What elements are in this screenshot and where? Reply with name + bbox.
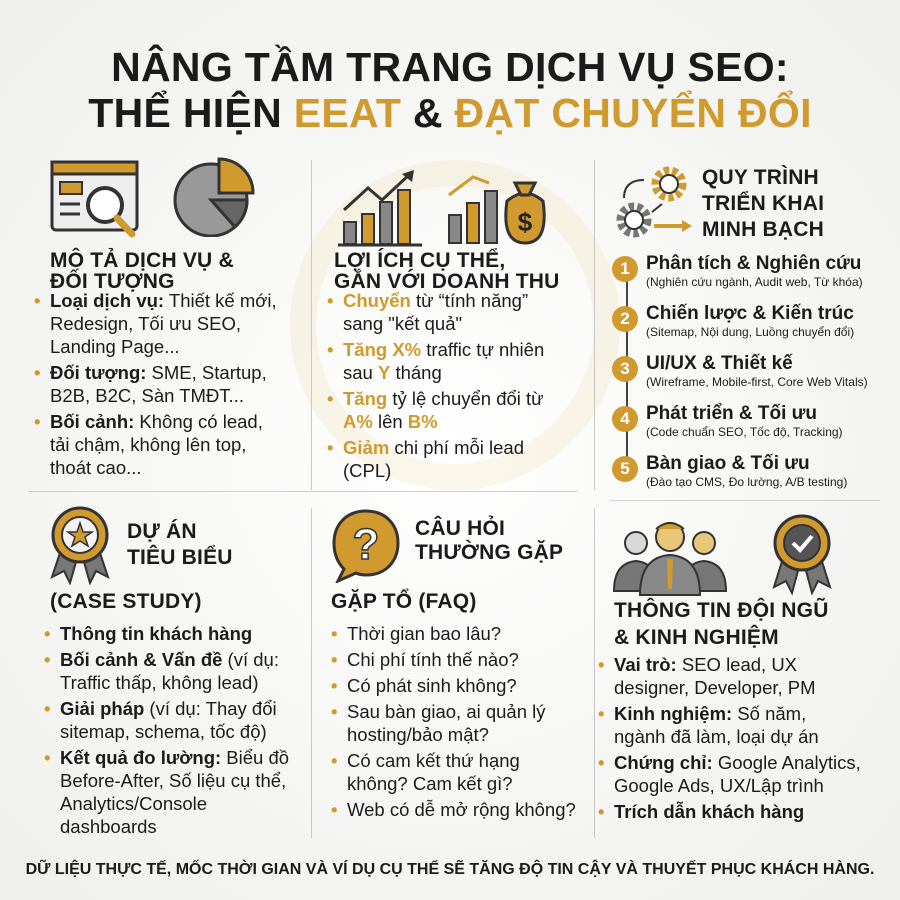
bullet list: Kinh nghiệm: Số năm, — [614, 703, 806, 724]
heading: TRIỂN KHAI — [702, 192, 824, 215]
bullet list: Loại dịch vụ: Thiết kế mới, — [50, 290, 277, 311]
heading: MINH BẠCH — [702, 218, 824, 241]
heading — [334, 248, 559, 293]
bullet list: Web có dễ mở rộng không? — [347, 799, 576, 820]
panel: process: (Code chuẩn SEO, Tốc độ, Tracking) — [646, 425, 843, 439]
bullet list: Giải pháp (ví dụ: Thay đổi — [60, 698, 277, 719]
bullet list: sitemap, schema, tốc độ) — [60, 721, 267, 742]
bullet list: sang "kết quả" — [343, 313, 462, 334]
icon: award badge — [50, 506, 110, 585]
bullet list — [332, 623, 576, 820]
bullet list: Có phát sinh không? — [347, 675, 517, 696]
bullet list: Kết quả đo lường: Biểu đồ — [60, 747, 289, 768]
bullet list: Google Ads, UX/Lập trình — [614, 775, 824, 796]
panel: process: (Sitemap, Nội dung, Luồng chuyển đổi) — [646, 325, 854, 339]
heading: & KINH NGHIỆM — [614, 626, 779, 649]
bullet list: Tăng tỷ lệ chuyển đổi từ — [343, 388, 544, 409]
bullet list: Analytics/Console — [60, 793, 207, 814]
heading: THƯỜNG GẶP — [415, 541, 563, 564]
bullet list: Giảm chi phí mỗi lead — [343, 437, 524, 458]
footer: DỮ LIỆU THỰC TẾ, MỐC THỜI GIAN VÀ VÍ DỤ CỤ THỂ SẼ TĂNG ĐỘ TIN CẬY VÀ THUYẾT PHỤC KHÁCH HÀNG. — [26, 861, 874, 878]
panel: process: Bàn giao & Tối ưu — [646, 453, 810, 474]
panel: process: UI/UX & Thiết kế — [646, 353, 793, 374]
bullet list: thoát cao... — [50, 457, 142, 478]
bullet list: (CPL) — [343, 460, 391, 481]
icon: money bag chart: $ — [518, 207, 533, 237]
title: NÂNG TẦM TRANG DỊCH VỤ SEO: — [111, 44, 789, 90]
heading — [415, 516, 563, 564]
bullet list — [598, 654, 861, 822]
bullet list: designer, Developer, PM — [614, 677, 816, 698]
heading: DỰ ÁN — [127, 520, 197, 543]
bullet list: Thời gian bao lâu? — [347, 623, 501, 644]
bullet list: Có cam kết thứ hạng — [347, 750, 520, 771]
panel: process: Phát triển & Tối ưu — [646, 403, 817, 424]
bullet list: hosting/bảo mật? — [347, 724, 489, 745]
bullet list — [328, 290, 544, 481]
bullet list: Landing Page... — [50, 336, 180, 357]
bullet list: Vai trò: SEO lead, UX — [614, 654, 797, 675]
bullet list: Chứng chỉ: Google Analytics, — [614, 752, 861, 773]
bullet list — [44, 623, 289, 837]
panel: process: Chiến lược & Kiến trúc — [646, 303, 854, 324]
subheading: GẶP TỔ (FAQ) — [331, 590, 477, 613]
icon: money bag chart — [448, 175, 546, 244]
bullet list: Đối tượng: SME, Startup, — [50, 362, 267, 383]
heading — [614, 598, 829, 649]
bullet list: Thông tin khách hàng — [60, 623, 252, 644]
panel: process: (Nghiên cứu ngành, Audit web, Từ khóa) — [646, 275, 863, 289]
icon: gears — [616, 166, 692, 238]
title — [88, 44, 812, 136]
heading: GẮN VỚI DOANH THU — [334, 270, 559, 293]
heading: QUY TRÌNH — [702, 166, 819, 189]
step 5 — [612, 453, 847, 489]
heading: CÂU HỎI — [415, 517, 505, 540]
panel: process: 1 — [620, 259, 630, 278]
bullet list — [34, 290, 277, 478]
heading: MÔ TẢ DỊCH VỤ & — [50, 249, 234, 272]
bullet list: không? Cam kết gì? — [347, 773, 513, 794]
bullet list: B2B, B2C, Sàn TMĐT... — [50, 385, 244, 406]
panel: case study — [44, 506, 289, 837]
heading — [127, 519, 233, 569]
step 2 — [612, 303, 854, 339]
step 4 — [612, 403, 843, 439]
subheading: (CASE STUDY) — [50, 590, 202, 613]
panel: process: 2 — [620, 309, 630, 328]
panel: service description — [34, 158, 277, 478]
bullet list: Before-After, Số liệu cụ thể, — [60, 770, 286, 791]
step 3 — [612, 353, 868, 389]
panel: FAQ — [331, 510, 576, 820]
bullet list: Tăng X% traffic tự nhiên — [343, 339, 544, 360]
panel: process: 5 — [620, 459, 630, 478]
panel: benefits — [328, 170, 559, 481]
bullet list: sau Y tháng — [343, 362, 442, 383]
bullet list: ngành đã làm, loại dự án — [614, 726, 819, 747]
panel: process: Phân tích & Nghiên cứu — [646, 253, 861, 274]
bullet list: Chi phí tính thế nào? — [347, 649, 519, 670]
bullet list: Trích dẫn khách hàng — [614, 801, 804, 822]
bullet list: A% lên B% — [343, 411, 438, 432]
heading: LỢI ÍCH CỤ THỂ, — [334, 249, 505, 272]
bullet list: Redesign, Tối ưu SEO, — [50, 313, 241, 334]
panel: process — [612, 165, 868, 489]
bullet list: Traffic thấp, không lead) — [60, 672, 258, 693]
icon: growth bars — [338, 170, 422, 246]
icon: team people — [613, 522, 727, 596]
bullet list: Bối cảnh & Vấn đề (ví dụ: — [60, 649, 279, 670]
bullet list: dashboards — [60, 816, 157, 837]
panel: process: 3 — [620, 359, 630, 378]
bullet list: Sau bàn giao, ai quản lý — [347, 701, 546, 722]
title: THỂ HIỆN EEAT & ĐẠT CHUYỂN ĐỔI — [88, 90, 812, 136]
icon: question bubble: ? — [353, 520, 379, 569]
panel: team — [598, 514, 861, 822]
panel: process: 4 — [620, 409, 630, 428]
step 1 — [612, 253, 863, 289]
icon: pie chart — [174, 158, 254, 237]
icon: browser search — [50, 160, 138, 238]
heading — [50, 248, 234, 293]
panel: process: (Đào tạo CMS, Đo lường, A/B testing) — [646, 475, 847, 489]
bullet list: Bối cảnh: Không có lead, — [50, 411, 263, 432]
heading: TIÊU BIỂU — [127, 546, 233, 569]
heading: THÔNG TIN ĐỘI NGŨ — [614, 599, 829, 622]
bullet list: Chuyển từ “tính năng” — [343, 290, 528, 311]
watermark — [290, 160, 620, 490]
icon: question bubble — [332, 510, 400, 583]
heading: ĐỐI TƯỢNG — [50, 270, 175, 293]
bullet list: tải chậm, không lên top, — [50, 434, 246, 455]
heading — [702, 165, 824, 241]
icon: check badge — [772, 514, 832, 596]
panel: process: (Wireframe, Mobile-first, Core Web Vitals) — [646, 375, 868, 389]
